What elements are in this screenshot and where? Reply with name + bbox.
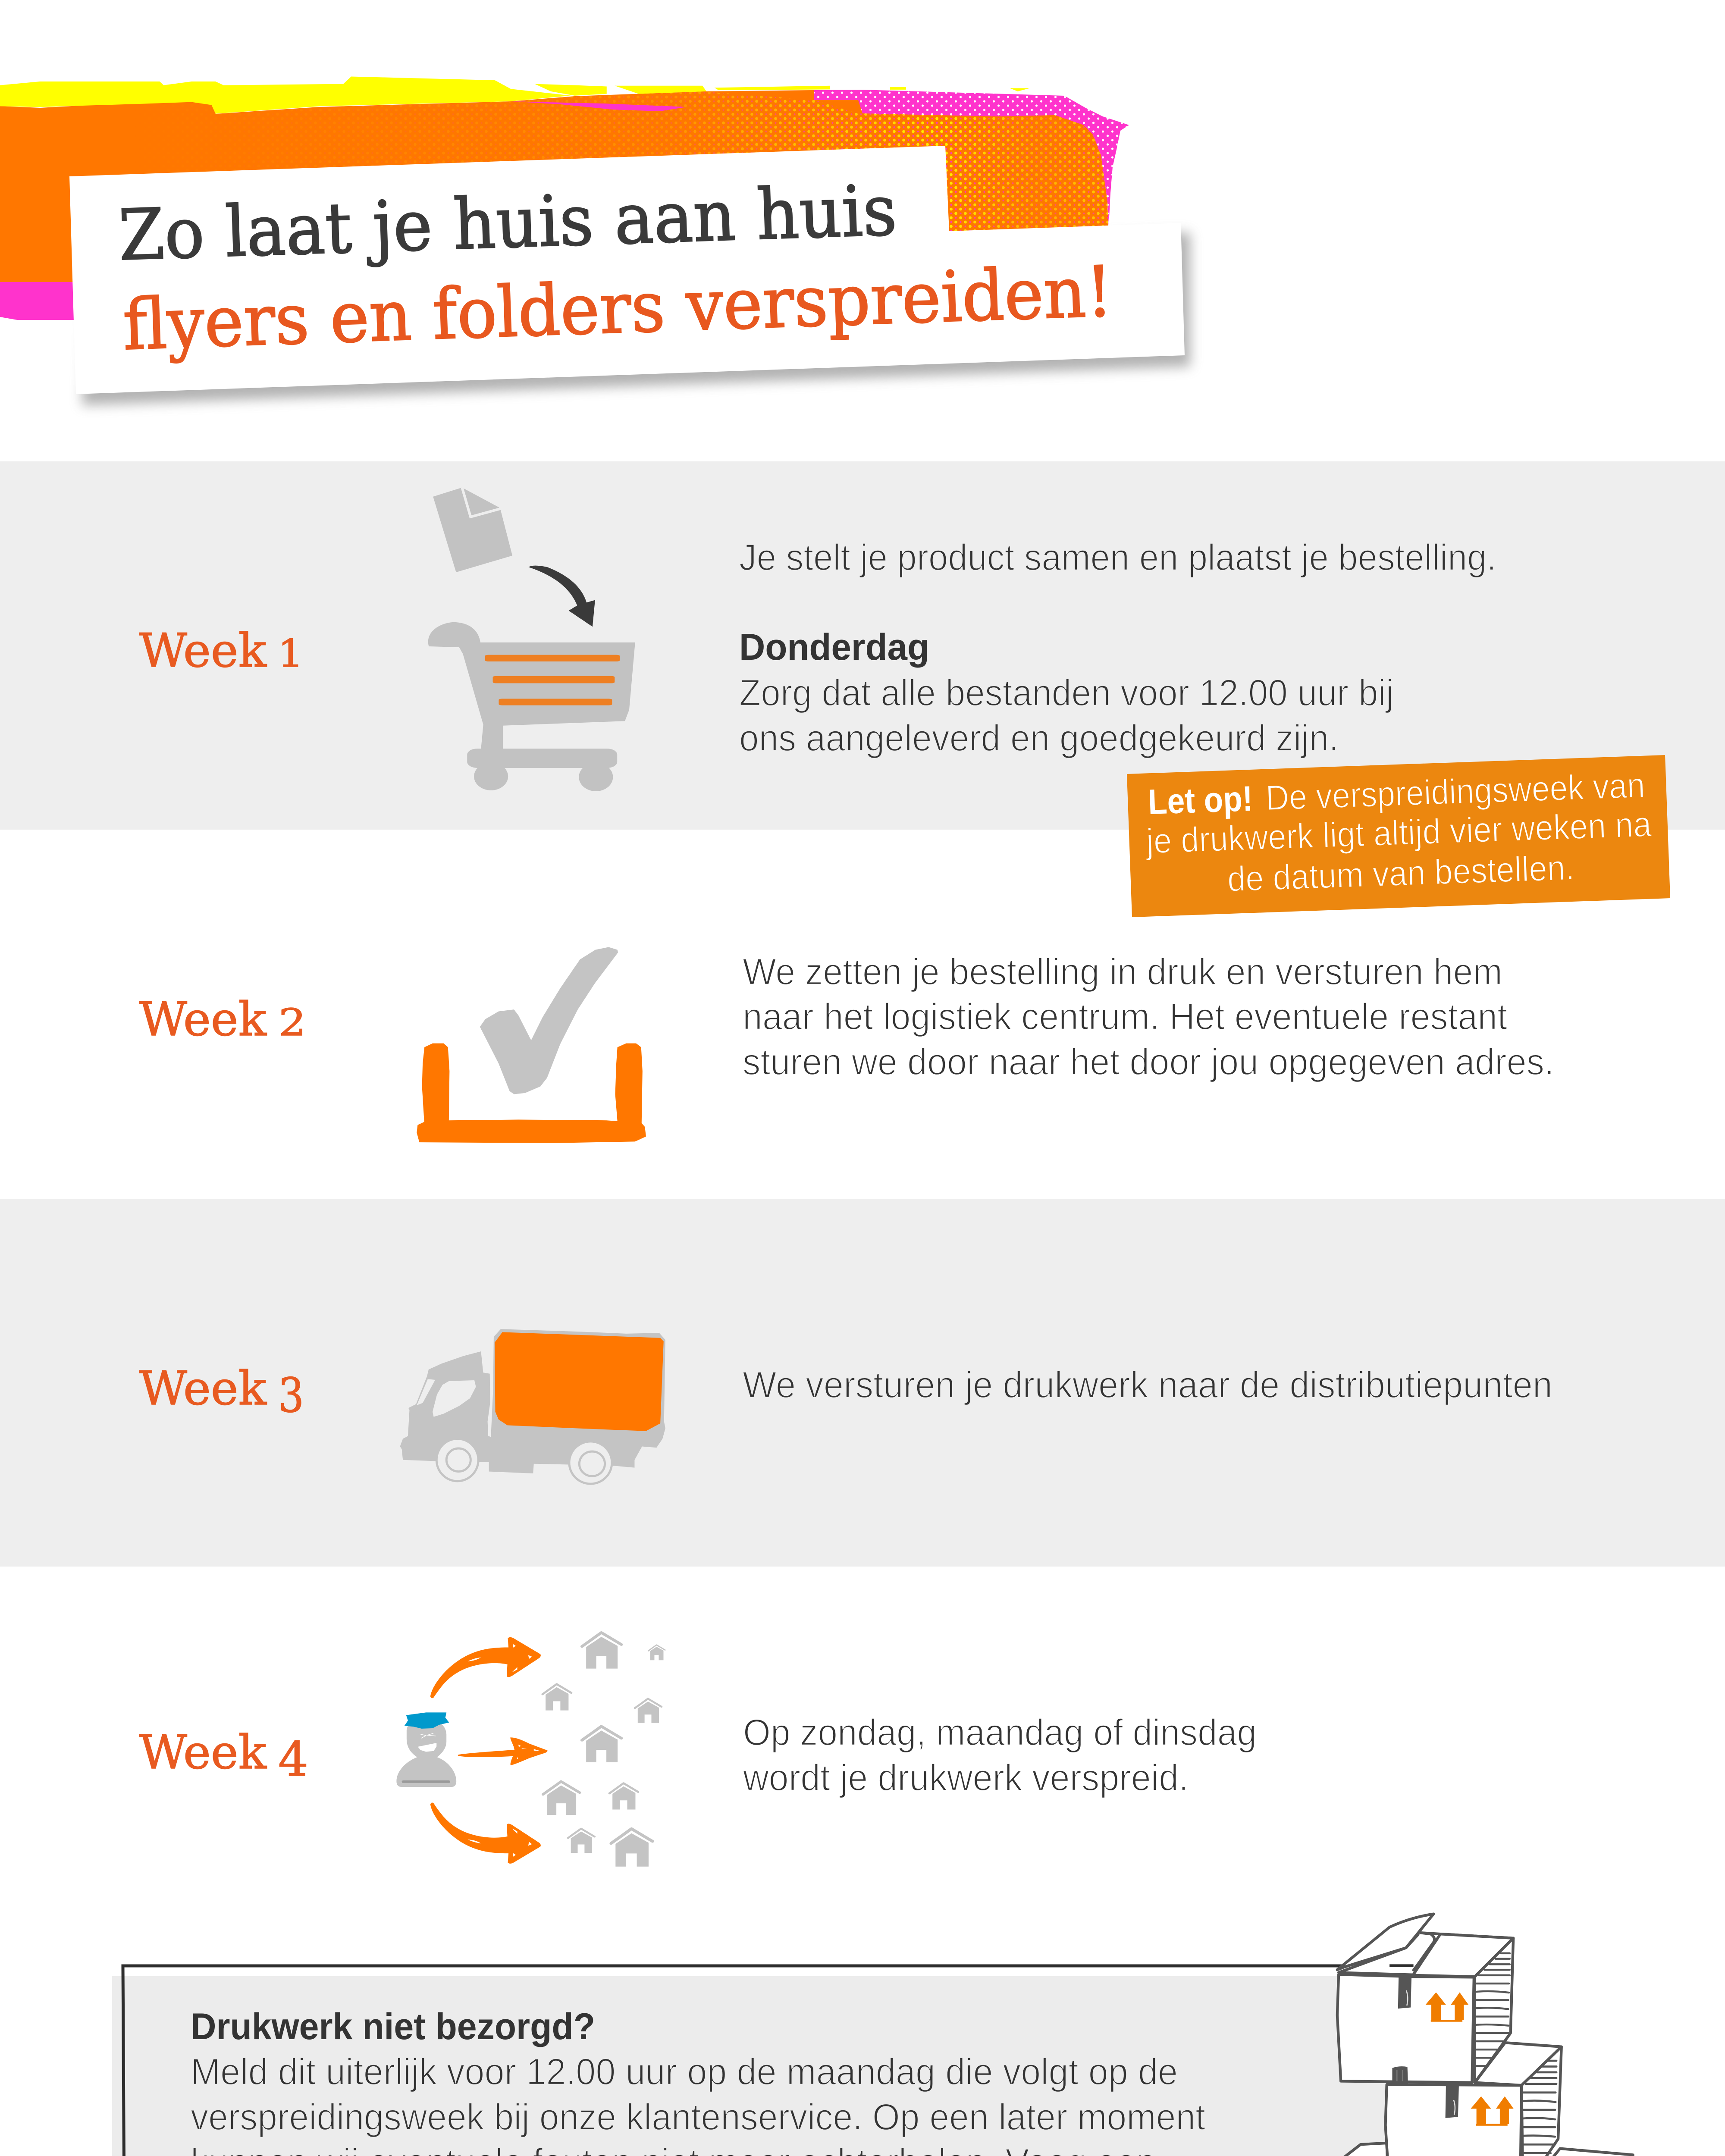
icon: mail carrier delivering to houses [396,1633,665,1867]
callout: let op [1127,755,1670,917]
week 2 line 3: sturen we door naar het door jou opgegeven adres. [743,1041,1554,1083]
week 3 text: We versturen je drukwerk naar de distributiepunten [743,1364,1552,1406]
week 2 label: Week [139,993,267,1047]
box: top with open flap [1337,1914,1513,2084]
title line 1: Zo laat je huis aan huis [117,170,898,276]
houses [543,1633,665,1867]
week 1 label: Week [139,624,267,678]
week 2 label: 2 [279,1001,306,1044]
week 4 line 1: Op zondag, maandag of dinsdag [743,1712,1257,1753]
week 4 text [743,1712,1257,1799]
week 4 label: 4 [278,1732,308,1787]
callout line 3: de datum van bestellen. [1227,848,1575,899]
truck windows [417,1379,476,1417]
box: bottom right [1448,2149,1633,2156]
box: bottom left [1304,2143,1448,2156]
callout line 1: De verspreidingsweek van [1265,766,1646,818]
panel: drukwerk niet bezorgd [112,1966,1423,2156]
week 1 intro: Je stelt je product samen en plaatst je bestelling. [739,537,1496,578]
panel heading: Drukwerk niet bezorgd? [191,2006,595,2047]
week 4 label: Week [139,1726,267,1780]
panel line 2: verspreidingsweek bij onze klantenservice. Op een later moment [191,2096,1205,2138]
truck wheels [436,1439,612,1484]
callout line 2: je drukwerk ligt altijd vier weken na [1145,805,1652,861]
icon: check mark in orange tray [417,947,646,1143]
panel background [112,1976,1423,2156]
icon: document into shopping cart [428,488,635,791]
arrow: straight [458,1737,548,1765]
box: middle [1386,2043,1562,2156]
icon: cart [428,622,635,791]
week 2 line 1: We zetten je bestelling in druk en versturen hem [743,951,1502,993]
week 2 text [743,951,1554,1083]
panel line 1: Meld dit uiterlijk voor 12.00 uur op de maandag die volgt op de [191,2051,1178,2093]
week 1 text [739,537,1496,759]
carrier [396,1712,456,1787]
week 1 detail line 1: Zorg dat alle bestanden voor 12.00 uur bij [739,672,1394,714]
week 1 heading: Donderdag [739,627,929,668]
title line 2: flyers en folders verspreiden! [122,251,1114,366]
panel: week 3 band [0,1199,1725,1567]
truck body [400,1329,665,1473]
truck cargo [495,1332,664,1431]
arrow: down [430,1802,541,1864]
card paper [69,146,1185,394]
card shadow [82,233,1190,405]
week 3 label: Week [139,1362,267,1416]
week 3 label: 3 [278,1368,304,1423]
check mark [480,947,618,1094]
icon: stacked boxes [1304,1914,1633,2156]
panel outline [123,1966,1343,2156]
week 2 line 2: naar het logistiek centrum. Het eventuele restant [743,996,1507,1037]
icon: document [433,488,512,572]
arrow: up [430,1637,541,1698]
icon: delivery truck [400,1329,665,1484]
orange tray [417,1044,646,1143]
title card [69,146,1190,405]
callout box [1127,755,1670,917]
callout line 1: Let op! [1148,779,1253,822]
icon: arrow into cart [529,566,595,627]
header paint brush banner [0,76,1130,320]
panel: week 1 band [0,461,1725,830]
week 1 detail line 2: ons aangeleverd en goedgekeurd zijn. [739,718,1339,759]
week 1 label: 1 [278,631,304,676]
week 4 line 2: wordt je drukwerk verspreid. [743,1757,1189,1799]
